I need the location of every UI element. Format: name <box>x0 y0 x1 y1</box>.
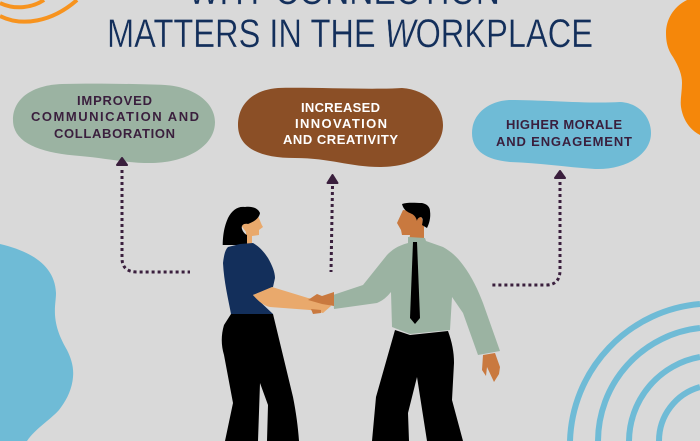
woman arm and hand <box>253 287 331 313</box>
decoration: orange arcs top left <box>0 0 77 22</box>
panel: higher morale bubble: AND ENGAGEMENT <box>496 134 632 149</box>
arrow: dotted right arrow <box>491 171 565 285</box>
woman trousers <box>222 314 299 441</box>
man shirt <box>333 237 500 355</box>
woman hair <box>223 207 260 245</box>
panel: higher morale bubble <box>472 100 651 169</box>
figure: man <box>308 203 500 441</box>
panel: increased innovation bubble <box>238 88 443 167</box>
figure: woman <box>222 207 331 441</box>
arrow: dotted left arrow <box>117 158 190 272</box>
man right hand <box>482 353 500 382</box>
woman neck and face <box>240 216 263 246</box>
man trousers <box>372 330 463 441</box>
panel: higher morale bubble: HIGHER MORALE <box>506 117 622 132</box>
man hair <box>402 203 430 228</box>
panel: improved communication bubble: COMMUNICATION AND <box>31 109 199 124</box>
man face and neck <box>397 210 424 241</box>
decoration: orange blob top right <box>666 0 700 135</box>
man tie <box>410 242 420 324</box>
panel: improved communication bubble: IMPROVED <box>77 93 152 108</box>
panel: increased innovation bubble: INCREASED <box>301 100 380 115</box>
man shaking hand <box>308 292 334 314</box>
arrow: dotted centre arrow <box>328 175 338 272</box>
decoration: blue blob left <box>0 244 73 441</box>
title: MATTERS IN THE WORKPLACE <box>107 12 593 56</box>
panel: improved communication bubble: COLLABORATION <box>54 126 175 141</box>
panel: increased innovation bubble: INNOVATION <box>295 116 387 131</box>
panel: increased innovation bubble: AND CREATIVITY <box>283 132 398 147</box>
panel: improved communication bubble <box>13 84 215 163</box>
decoration: blue concentric arcs bottom right <box>570 304 700 441</box>
woman shirt <box>223 243 275 314</box>
